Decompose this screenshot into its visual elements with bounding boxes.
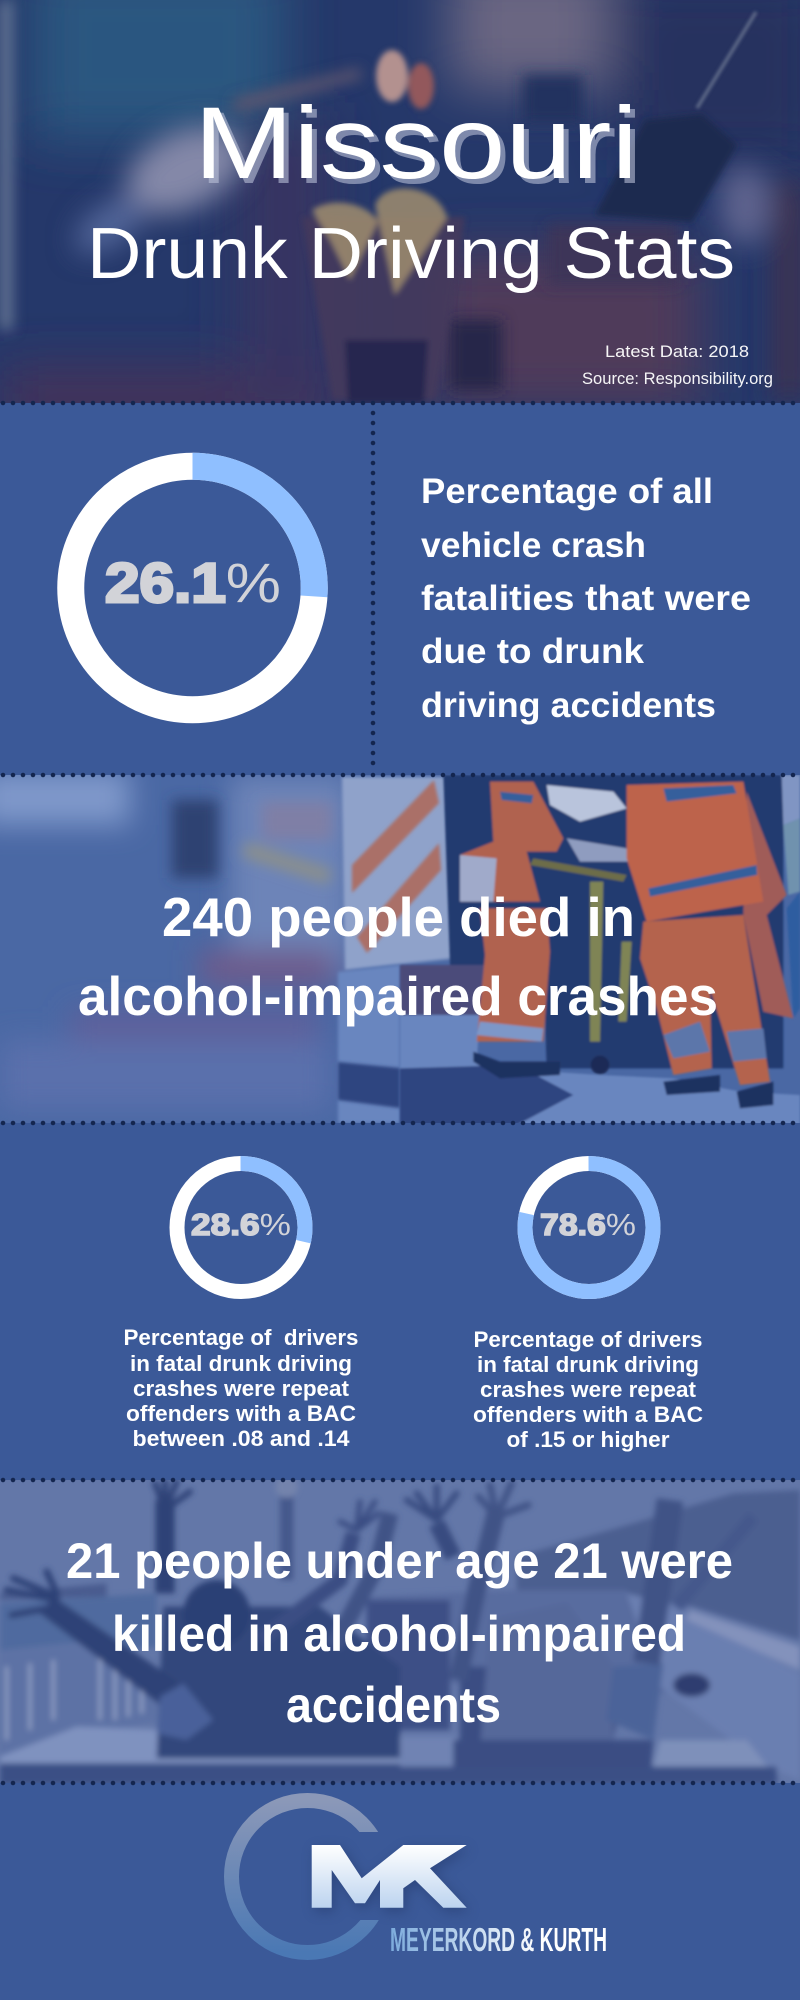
- caption: BAC .15 or higher: offenders with a BAC: [473, 1402, 703, 1427]
- donut value: 26.1%: 26.1%: [105, 551, 281, 614]
- data note: source: Source: Responsibility.org: [582, 370, 773, 388]
- photo: bar drinks and car keys: [0, 0, 800, 430]
- description: percentage of fatalities: driving accidents: [421, 686, 716, 725]
- logo mark: MK: [312, 1845, 467, 1908]
- photo: ambulance and paramedics: [0, 770, 800, 1125]
- caption: BAC .08 to .14: in fatal drunk driving: [130, 1351, 352, 1376]
- heading: 240 people died: alcohol-impaired crashes: [78, 965, 718, 1027]
- caption: BAC .15 or higher: Percentage of drivers: [474, 1327, 702, 1352]
- caption: BAC .15 or higher: crashes were repeat: [480, 1377, 697, 1402]
- heading: 240 people died: 240 people died in: [162, 886, 635, 948]
- caption: BAC .08 to .14: between .08 and .14: [132, 1426, 350, 1451]
- caption: BAC .08 to .14: [124, 1325, 358, 1451]
- description: percentage of fatalities: Percentage of all: [421, 472, 713, 511]
- scene detail: paramedics: [400, 775, 800, 1125]
- donut value: 28.6%: 28.6 %: [191, 1207, 291, 1242]
- heading: 21 people under age 21: killed in alcohol-impaired: [112, 1606, 686, 1662]
- scene details: [0, 1475, 800, 1785]
- description: percentage of fatalities: fatalities that were: [421, 579, 751, 618]
- subtitle: Drunk Driving Stats: Drunk Driving Stats: [87, 214, 735, 294]
- heading: 21 people under age 21: [66, 1533, 733, 1733]
- logo wordmark: MEYERKORD & KURTH: [390, 1921, 607, 1958]
- logo ring: [232, 1800, 384, 1952]
- heading: 21 people under age 21: accidents: [286, 1677, 501, 1733]
- heading: 240 people died: [78, 886, 718, 1027]
- panel: repeat offender statistics: [0, 1123, 800, 1480]
- caption: BAC .15 or higher: [473, 1327, 703, 1452]
- caption: BAC .08 to .14: crashes were repeat: [133, 1376, 350, 1401]
- panel: 26.1 percent statistic: [0, 403, 800, 775]
- footer panel background: [0, 1783, 800, 2000]
- title: Missouri: Missouri: [194, 86, 638, 200]
- caption: BAC .08 to .14: Percentage of drivers: [124, 1325, 358, 1350]
- donut value: 78.6%: 78.6%: [540, 1207, 636, 1242]
- caption: BAC .08 to .14: offenders with a BAC: [126, 1401, 356, 1426]
- photo: friends raising hands in a convertible: [0, 1475, 800, 1785]
- caption: BAC .15 or higher: of .15 or higher: [506, 1427, 670, 1452]
- data note: latest data: Latest Data: 2018: [605, 343, 749, 361]
- caption: BAC .15 or higher: in fatal drunk driving: [477, 1352, 699, 1377]
- scene detail: right half background: [367, 1483, 800, 1785]
- donut chart: 26.1 percent: [71, 466, 314, 710]
- logo: Meyerkord and Kurth: [232, 1800, 607, 1958]
- dotted dividers: [3, 403, 800, 1783]
- description: percentage of fatalities: due to drunk: [421, 632, 645, 671]
- description: percentage of fatalities: [421, 472, 751, 725]
- heading: 21 people under age 21: 21 people under age 21 were: [66, 1533, 733, 1589]
- description: percentage of fatalities: vehicle crash: [421, 526, 646, 565]
- donut chart: 28.6 percent: [177, 1164, 305, 1292]
- scene detail: left half people: [0, 1475, 400, 1785]
- donut chart: 78.6 percent: [525, 1164, 653, 1292]
